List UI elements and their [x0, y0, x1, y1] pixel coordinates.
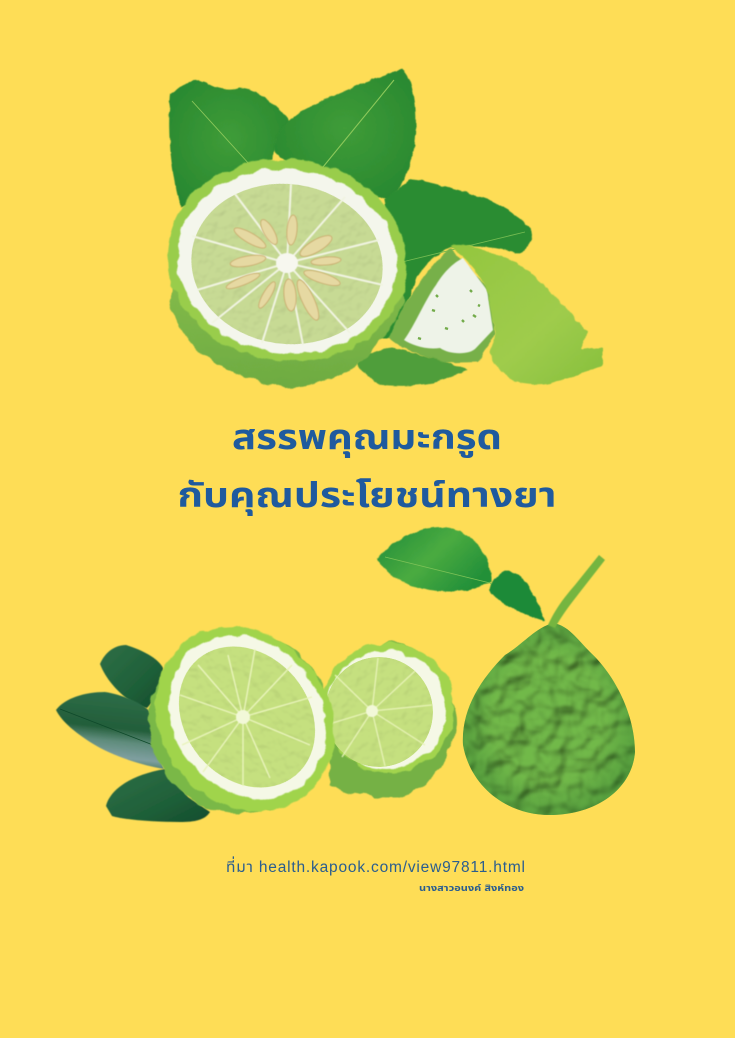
illustration: sliced kaffir lime and whole fruit — [56, 527, 635, 847]
illustration: halved kaffir lime with leaves and peel — [154, 69, 603, 388]
author credit: นางสาวอนงค์ สิงห์ทอง — [419, 883, 524, 893]
fruit: seeds — [225, 215, 342, 322]
whole fruit: body — [463, 623, 635, 815]
slice: front body — [149, 633, 331, 813]
peel: white inner — [404, 258, 493, 353]
peel: outer skin — [450, 244, 603, 384]
peel: inner green edge — [389, 248, 495, 363]
source line: ที่มา health.kapook.com/view97811.html — [226, 856, 525, 876]
fruit: green rim — [154, 143, 420, 377]
slice: rear pith — [326, 651, 446, 769]
peel: lower strip — [357, 348, 467, 385]
slice: rear body — [328, 642, 457, 797]
slice: front flesh — [151, 619, 343, 815]
leaf: upper dark — [100, 645, 163, 708]
leaf: middle silver — [56, 692, 164, 769]
leaf: lower dark — [106, 769, 210, 822]
title — [178, 418, 556, 516]
slice: rear flesh — [325, 657, 433, 767]
fruit: flesh segments — [181, 171, 393, 357]
slice: rear rim — [322, 643, 454, 773]
slice: front pith — [135, 603, 359, 831]
leaf: top centre — [273, 69, 416, 201]
title: สรรพคุณมะกรูด — [232, 418, 502, 458]
leaf: top left — [169, 81, 290, 208]
leaf: right — [372, 179, 533, 338]
slice: front rim — [118, 591, 372, 847]
fruit: white pith — [165, 155, 409, 367]
leaf: small bright — [489, 570, 545, 621]
title: กับคุณประโยชน์ทางยา — [178, 476, 556, 516]
fruit: skin side — [170, 270, 405, 388]
leaf: large bright — [377, 527, 544, 620]
whole fruit: stem — [548, 555, 605, 628]
